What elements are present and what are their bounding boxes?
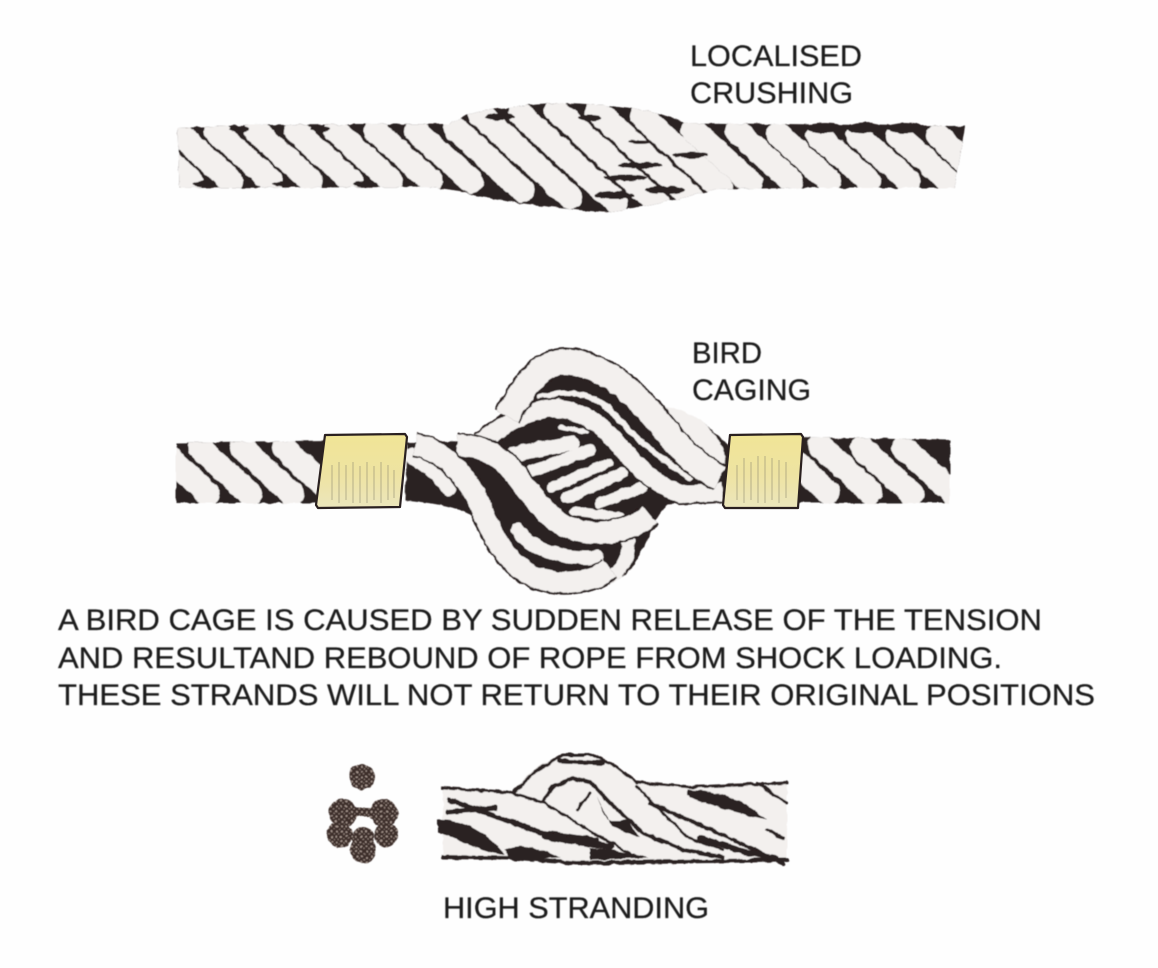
paragraph: bird cage explanation xyxy=(58,604,1095,712)
rope: localised crushing xyxy=(136,103,965,212)
label: localised crushing xyxy=(690,40,862,110)
paragraph: bird cage explanation: THESE STRANDS WILL NOT RETURN TO THEIR ORIGINAL POSITIONS xyxy=(58,679,1095,712)
label: high stranding: HIGH STRANDING xyxy=(443,892,709,925)
big top arc xyxy=(507,362,720,478)
rope: bird caging xyxy=(158,351,954,591)
rope section right of second collar xyxy=(778,437,954,503)
label: bird caging: BIRD xyxy=(692,337,762,370)
lower strand xyxy=(457,445,650,533)
paragraph: bird cage explanation: AND RESULTAND REBOUND OF ROPE FROM SHOCK LOADING. xyxy=(58,642,1002,675)
label: bird caging: CAGING xyxy=(692,374,811,407)
open cage of loosened strands xyxy=(405,351,730,591)
rope: high stranding xyxy=(438,754,787,863)
collar: left xyxy=(316,434,407,508)
dark wear along rope edges xyxy=(193,114,923,199)
label: localised crushing: LOCALISED xyxy=(690,40,862,73)
rope section left of first collar xyxy=(158,441,334,503)
second arc xyxy=(480,408,722,494)
icon: rope cross-section xyxy=(327,764,398,863)
knot strand xyxy=(652,416,715,472)
label: bird caging xyxy=(692,337,811,407)
collar: right xyxy=(723,434,803,508)
front crossing strand xyxy=(415,445,610,582)
label: localised crushing: CRUSHING xyxy=(690,77,853,110)
paragraph: bird cage explanation: A BIRD CAGE IS CAUSED BY SUDDEN RELEASE OF THE TENSION xyxy=(58,604,1042,637)
